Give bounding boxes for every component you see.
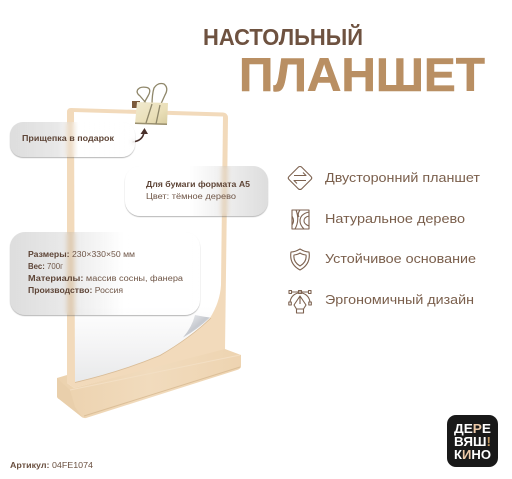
brand logo [447, 415, 498, 467]
brand logo: ВЯШ! [454, 434, 491, 449]
callout: specifications: Размеры: 230×330×50 мм [28, 250, 135, 259]
feature: ergonomic design: Эргономичный дизайн [325, 292, 474, 307]
feature: double-sided [288, 166, 480, 190]
callout: paper format [125, 166, 268, 216]
binder clip [132, 84, 168, 125]
callout: specifications: Вес: 700г [28, 262, 63, 271]
wooden base [57, 349, 241, 418]
callout: specifications: Материалы: массив сосны, фанера [28, 274, 184, 283]
feature: natural wood: Натуральное дерево [325, 211, 465, 226]
callout: clip gift: Прищепка в подарок [22, 134, 115, 143]
feature: ergonomic design [289, 290, 474, 313]
brand logo: ДЕРЕ [454, 421, 491, 436]
callout: specifications: Производство: Россия [28, 286, 123, 295]
callout: paper format: Цвет: тёмное дерево [146, 192, 237, 201]
title [203, 23, 485, 101]
title: НАСТОЛЬНЫЙ [203, 23, 363, 50]
feature: double-sided: Двусторонний планшет [325, 170, 480, 185]
callout: clip gift [10, 122, 135, 157]
wooden frame [67, 108, 228, 388]
title: ПЛАНШЕТ [239, 48, 485, 101]
feature: stable base [291, 249, 476, 270]
curved arrow to clip [132, 128, 148, 142]
paper sheet with curled corner [74, 112, 223, 382]
callout: specifications [10, 232, 200, 315]
article number: Артикул: 04FE1074 [10, 460, 93, 470]
callout: paper format: Для бумаги формата А5 [146, 180, 251, 189]
feature: natural wood [292, 210, 465, 229]
brand logo: КИНО [454, 447, 491, 462]
feature: stable base: Устойчивое основание [325, 251, 476, 266]
